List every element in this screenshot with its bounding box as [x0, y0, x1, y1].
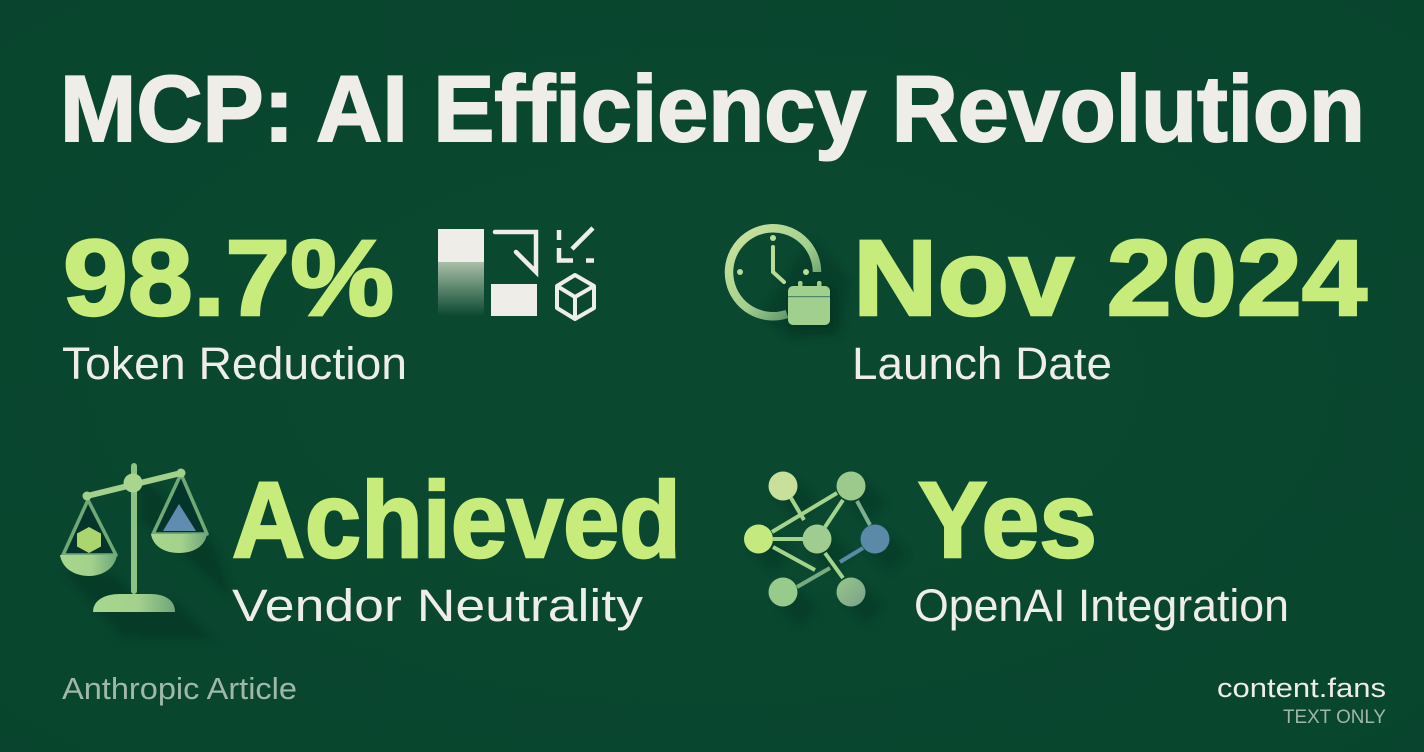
value: Nov 2024: Nov 2024 [853, 217, 1367, 338]
tag: TEXT ONLY: TEXT ONLY [1283, 707, 1386, 728]
icon: compression blocks [438, 228, 594, 319]
value: Yes: Yes [918, 459, 1097, 580]
title: MCP: AI Efficiency Revolution [60, 56, 1365, 161]
icon: clock and calendar [729, 228, 850, 340]
label: token reduction: Token Reduction [62, 338, 407, 389]
value: 98.7%: 98.7% [63, 217, 394, 338]
icon: balance scale [60, 463, 232, 640]
brand: content.fans: content.fans [1217, 673, 1386, 703]
value: Achieved: Achieved [232, 459, 681, 580]
label: openai integration: OpenAI Integration [914, 580, 1289, 631]
label: launch date: Launch Date [852, 338, 1112, 389]
source: Anthropic Article: Anthropic Article [62, 671, 297, 706]
panel: token reduction [62, 217, 594, 389]
icon: network graph [744, 472, 899, 618]
panel: launch date [729, 217, 1367, 389]
label: vendor neutrality: Vendor Neutrality [232, 580, 644, 631]
panel: vendor neutrality [60, 459, 681, 640]
panel: openai integration [744, 459, 1289, 631]
